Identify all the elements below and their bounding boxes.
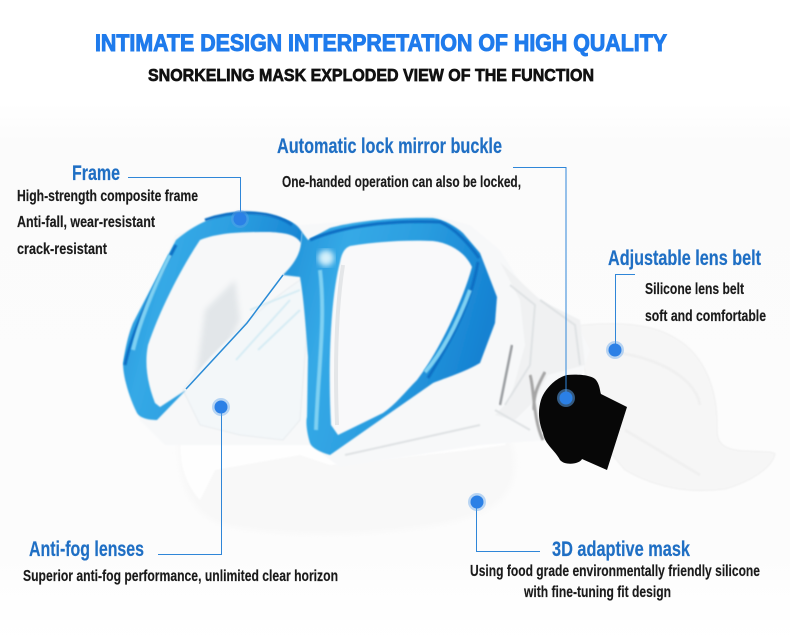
callout: buckle <box>277 135 575 407</box>
adaptive mask text: with fine-tuning fit design <box>523 584 671 601</box>
frame text: Anti-fall, wear-resistant <box>17 214 155 231</box>
snorkeling mask illustration <box>123 208 775 534</box>
frame heading: Frame <box>72 162 120 185</box>
frame leader <box>128 178 249 228</box>
buckle heading: Automatic lock mirror buckle <box>277 135 502 158</box>
strap <box>575 324 775 491</box>
frame text <box>17 188 198 258</box>
adaptive mask leader <box>468 493 540 552</box>
adaptive mask heading: 3D adaptive mask <box>552 538 690 561</box>
nose pocket <box>183 278 307 440</box>
anti-fog heading: Anti-fog lenses <box>29 538 144 561</box>
belt text: Silicone lens belt <box>645 281 744 298</box>
buckle <box>539 375 627 470</box>
callout: adaptive mask <box>468 493 760 601</box>
frame shine <box>125 213 479 378</box>
title: INTIMATE DESIGN INTERPRETATION OF HIGH QUALITY <box>95 30 667 57</box>
buckle text: One-handed operation can also be locked, <box>282 174 521 191</box>
anti-fog leader <box>158 398 230 554</box>
buckle leader <box>513 168 575 407</box>
belt leader <box>606 274 635 359</box>
callout: anti-fog <box>23 398 338 585</box>
blue frame: left band <box>123 212 302 420</box>
callout: belt <box>606 247 766 359</box>
belt text <box>645 281 766 325</box>
anti-fog text: Superior anti-fog performance, unlimited clear horizon <box>23 568 338 585</box>
frame text: crack-resistant <box>17 241 107 258</box>
side housing details <box>495 262 585 420</box>
silicone skirt <box>179 410 514 534</box>
right lens <box>330 241 472 435</box>
subtitle: SNORKELING MASK EXPLODED VIEW OF THE FUNCTION <box>148 65 594 85</box>
adaptive mask text <box>470 563 760 601</box>
frame text: High-strength composite frame <box>17 188 198 205</box>
callout: frame <box>17 162 249 258</box>
clear body <box>125 208 590 467</box>
blue frame: bridge and right band <box>283 218 497 455</box>
left lens <box>145 240 300 410</box>
nose edge <box>186 275 283 389</box>
